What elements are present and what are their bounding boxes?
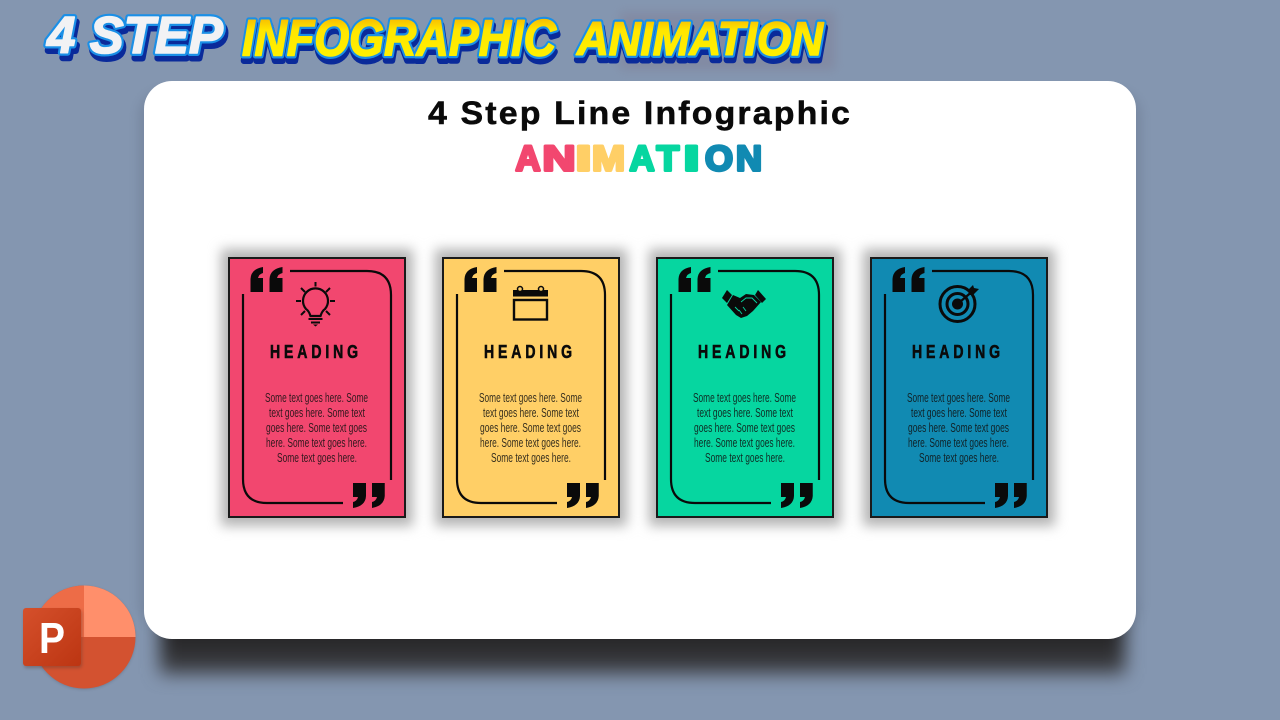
slide title: 4 Step Line Infographic	[428, 95, 852, 131]
slide subtitle: ANIMATION: N	[542, 140, 576, 178]
body text: text goes here. Some text	[911, 406, 1007, 420]
line frame	[671, 271, 819, 503]
icon: handshake	[722, 290, 766, 318]
icon: closing quote	[353, 483, 385, 508]
panel: step 2 card	[443, 258, 619, 517]
body text	[479, 391, 582, 465]
body text: goes here. Some text goes	[480, 421, 581, 435]
title words: INFOGRAPHIC: INFOGRAPHIC	[243, 14, 558, 72]
heading: HEADING	[484, 342, 576, 362]
line frame	[243, 271, 391, 503]
heading: HEADING	[270, 342, 362, 362]
panel: white slide	[144, 81, 1136, 639]
icon: closing quote	[995, 483, 1027, 508]
slide subtitle: ANIMATION: I	[576, 140, 592, 178]
icon: light bulb	[296, 282, 335, 326]
body text: Some text goes here.	[919, 451, 999, 465]
body text: here. Some text goes here.	[480, 436, 581, 450]
line frame	[885, 271, 1033, 503]
slide subtitle: ANIMATION: O	[705, 140, 733, 178]
body text: here. Some text goes here.	[266, 436, 367, 450]
body text: text goes here. Some text	[483, 406, 579, 420]
slide subtitle: ANIMATION: T	[657, 140, 679, 178]
heading: HEADING	[912, 342, 1004, 362]
body text: goes here. Some text goes	[908, 421, 1009, 435]
icon: target with arrow	[940, 285, 979, 322]
icon: PowerPoint logo: P	[39, 614, 65, 663]
body text: Some text goes here. Some	[907, 391, 1010, 405]
title words: 4 STEP: 4 STEP	[46, 7, 223, 65]
title words: ANIMATION: ANIMATION	[576, 12, 824, 65]
slide subtitle: ANIMATION	[516, 140, 762, 178]
icon: opening quote	[892, 267, 924, 292]
body text: Some text goes here.	[277, 451, 357, 465]
slide subtitle: ANIMATION: M	[592, 140, 625, 178]
body text	[693, 391, 796, 465]
slide subtitle: ANIMATION: I	[684, 140, 700, 178]
body text: text goes here. Some text	[697, 406, 793, 420]
title words: ANIMATION: ANIMATION	[577, 17, 825, 70]
panel: step 4 card	[871, 258, 1047, 517]
title words: INFOGRAPHIC: INFOGRAPHIC	[242, 10, 557, 66]
body text: Some text goes here. Some	[265, 391, 368, 405]
panel: step 1 card	[229, 258, 405, 517]
title words: ANIMATION: ANIMATION	[576, 12, 824, 65]
slide subtitle: ANIMATION: A	[516, 140, 540, 178]
icon: closing quote	[567, 483, 599, 508]
white panel shadow	[138, 90, 1142, 674]
icon: opening quote	[678, 267, 710, 292]
body text: here. Some text goes here.	[908, 436, 1009, 450]
title words: INFOGRAPHIC: INFOGRAPHIC	[242, 10, 557, 66]
title words: 4 STEP: 4 STEP	[48, 12, 225, 70]
icon: closing quote	[781, 483, 813, 508]
card shadows	[221, 249, 1055, 526]
body text: Some text goes here.	[705, 451, 785, 465]
body text: goes here. Some text goes	[694, 421, 795, 435]
body text: here. Some text goes here.	[694, 436, 795, 450]
body text: Some text goes here.	[491, 451, 571, 465]
video title banner	[46, 7, 825, 72]
slide subtitle: ANIMATION: N	[736, 140, 762, 178]
body text	[907, 391, 1010, 465]
title words: 4 STEP: 4 STEP	[46, 7, 223, 65]
line frame	[457, 271, 605, 503]
body text: Some text goes here. Some	[693, 391, 796, 405]
slide subtitle: ANIMATION: A	[630, 140, 654, 178]
body text: Some text goes here. Some	[479, 391, 582, 405]
icon: opening quote	[250, 267, 282, 292]
heading: HEADING	[698, 342, 790, 362]
icon: opening quote	[464, 267, 496, 292]
icon: calendar	[513, 286, 548, 320]
icon: PowerPoint logo	[23, 586, 136, 689]
body text: text goes here. Some text	[269, 406, 365, 420]
body text: goes here. Some text goes	[266, 421, 367, 435]
body text	[265, 391, 368, 465]
panel: step 3 card	[657, 258, 833, 517]
